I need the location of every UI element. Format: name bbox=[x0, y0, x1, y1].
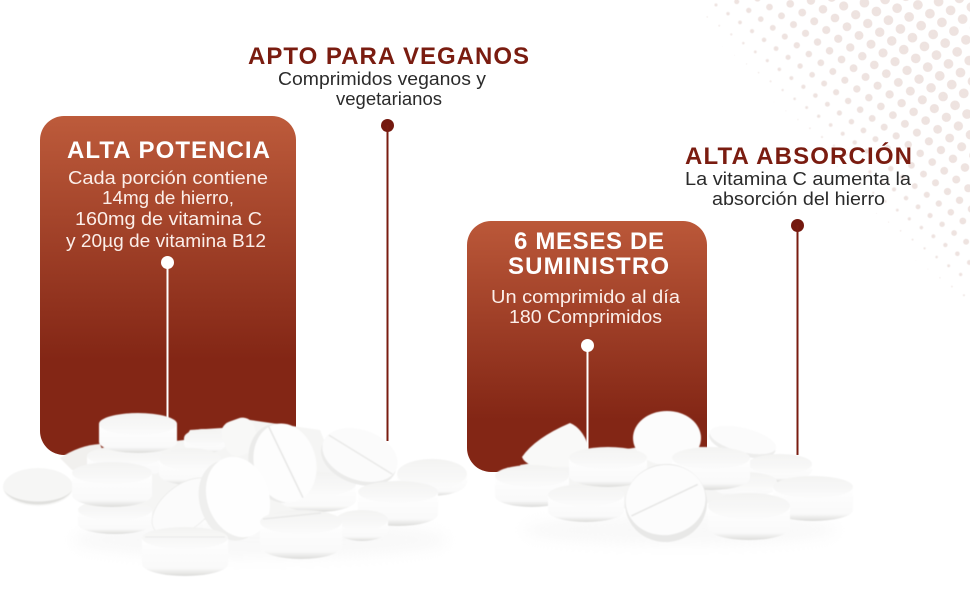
panel: alta potencia bbox=[40, 116, 296, 455]
tablets: right pile bbox=[495, 411, 853, 547]
text: suministro details bbox=[491, 287, 681, 327]
text: apto para veganos details: Comprimidos veganos y bbox=[278, 69, 486, 89]
text: alta absorcion details: absorción del hierro bbox=[712, 189, 885, 209]
heading: apto para veganos: APTO PARA VEGANOS bbox=[248, 43, 529, 70]
heading: seis meses de suministro: 6 MESES DE bbox=[514, 228, 664, 255]
panel: seis meses de suministro bbox=[467, 221, 707, 472]
pointer: suministro bbox=[581, 339, 594, 450]
text: alta potencia details: y 20µg de vitamina B12 bbox=[66, 231, 266, 251]
text: alta absorcion details bbox=[685, 169, 912, 209]
pointer: alta potencia bbox=[161, 256, 174, 432]
text: alta potencia details bbox=[66, 168, 268, 251]
tablets: left pile bbox=[3, 413, 467, 576]
text: alta potencia details: Cada porción contiene bbox=[68, 168, 268, 188]
text: suministro details: 180 Comprimidos bbox=[509, 307, 662, 327]
text: alta absorcion details: La vitamina C aumenta la bbox=[685, 169, 912, 189]
heading: seis meses de suministro: SUMINISTRO bbox=[508, 253, 669, 280]
text: apto para veganos details: vegetarianos bbox=[336, 89, 442, 109]
pointer: alta absorcion bbox=[791, 219, 804, 455]
text: alta potencia details: 160mg de vitamina C bbox=[75, 209, 262, 229]
pointer: apto para veganos bbox=[381, 119, 394, 441]
text: suministro details: Un comprimido al día bbox=[491, 287, 681, 307]
halftone dot background bbox=[700, 0, 970, 300]
heading: alta potencia: ALTA POTENCIA bbox=[67, 137, 270, 164]
text: apto para veganos details bbox=[278, 69, 486, 109]
heading: alta absorcion: ALTA ABSORCIÓN bbox=[685, 142, 912, 170]
text: alta potencia details: 14mg de hierro, bbox=[102, 188, 234, 208]
heading: seis meses de suministro bbox=[508, 228, 669, 280]
